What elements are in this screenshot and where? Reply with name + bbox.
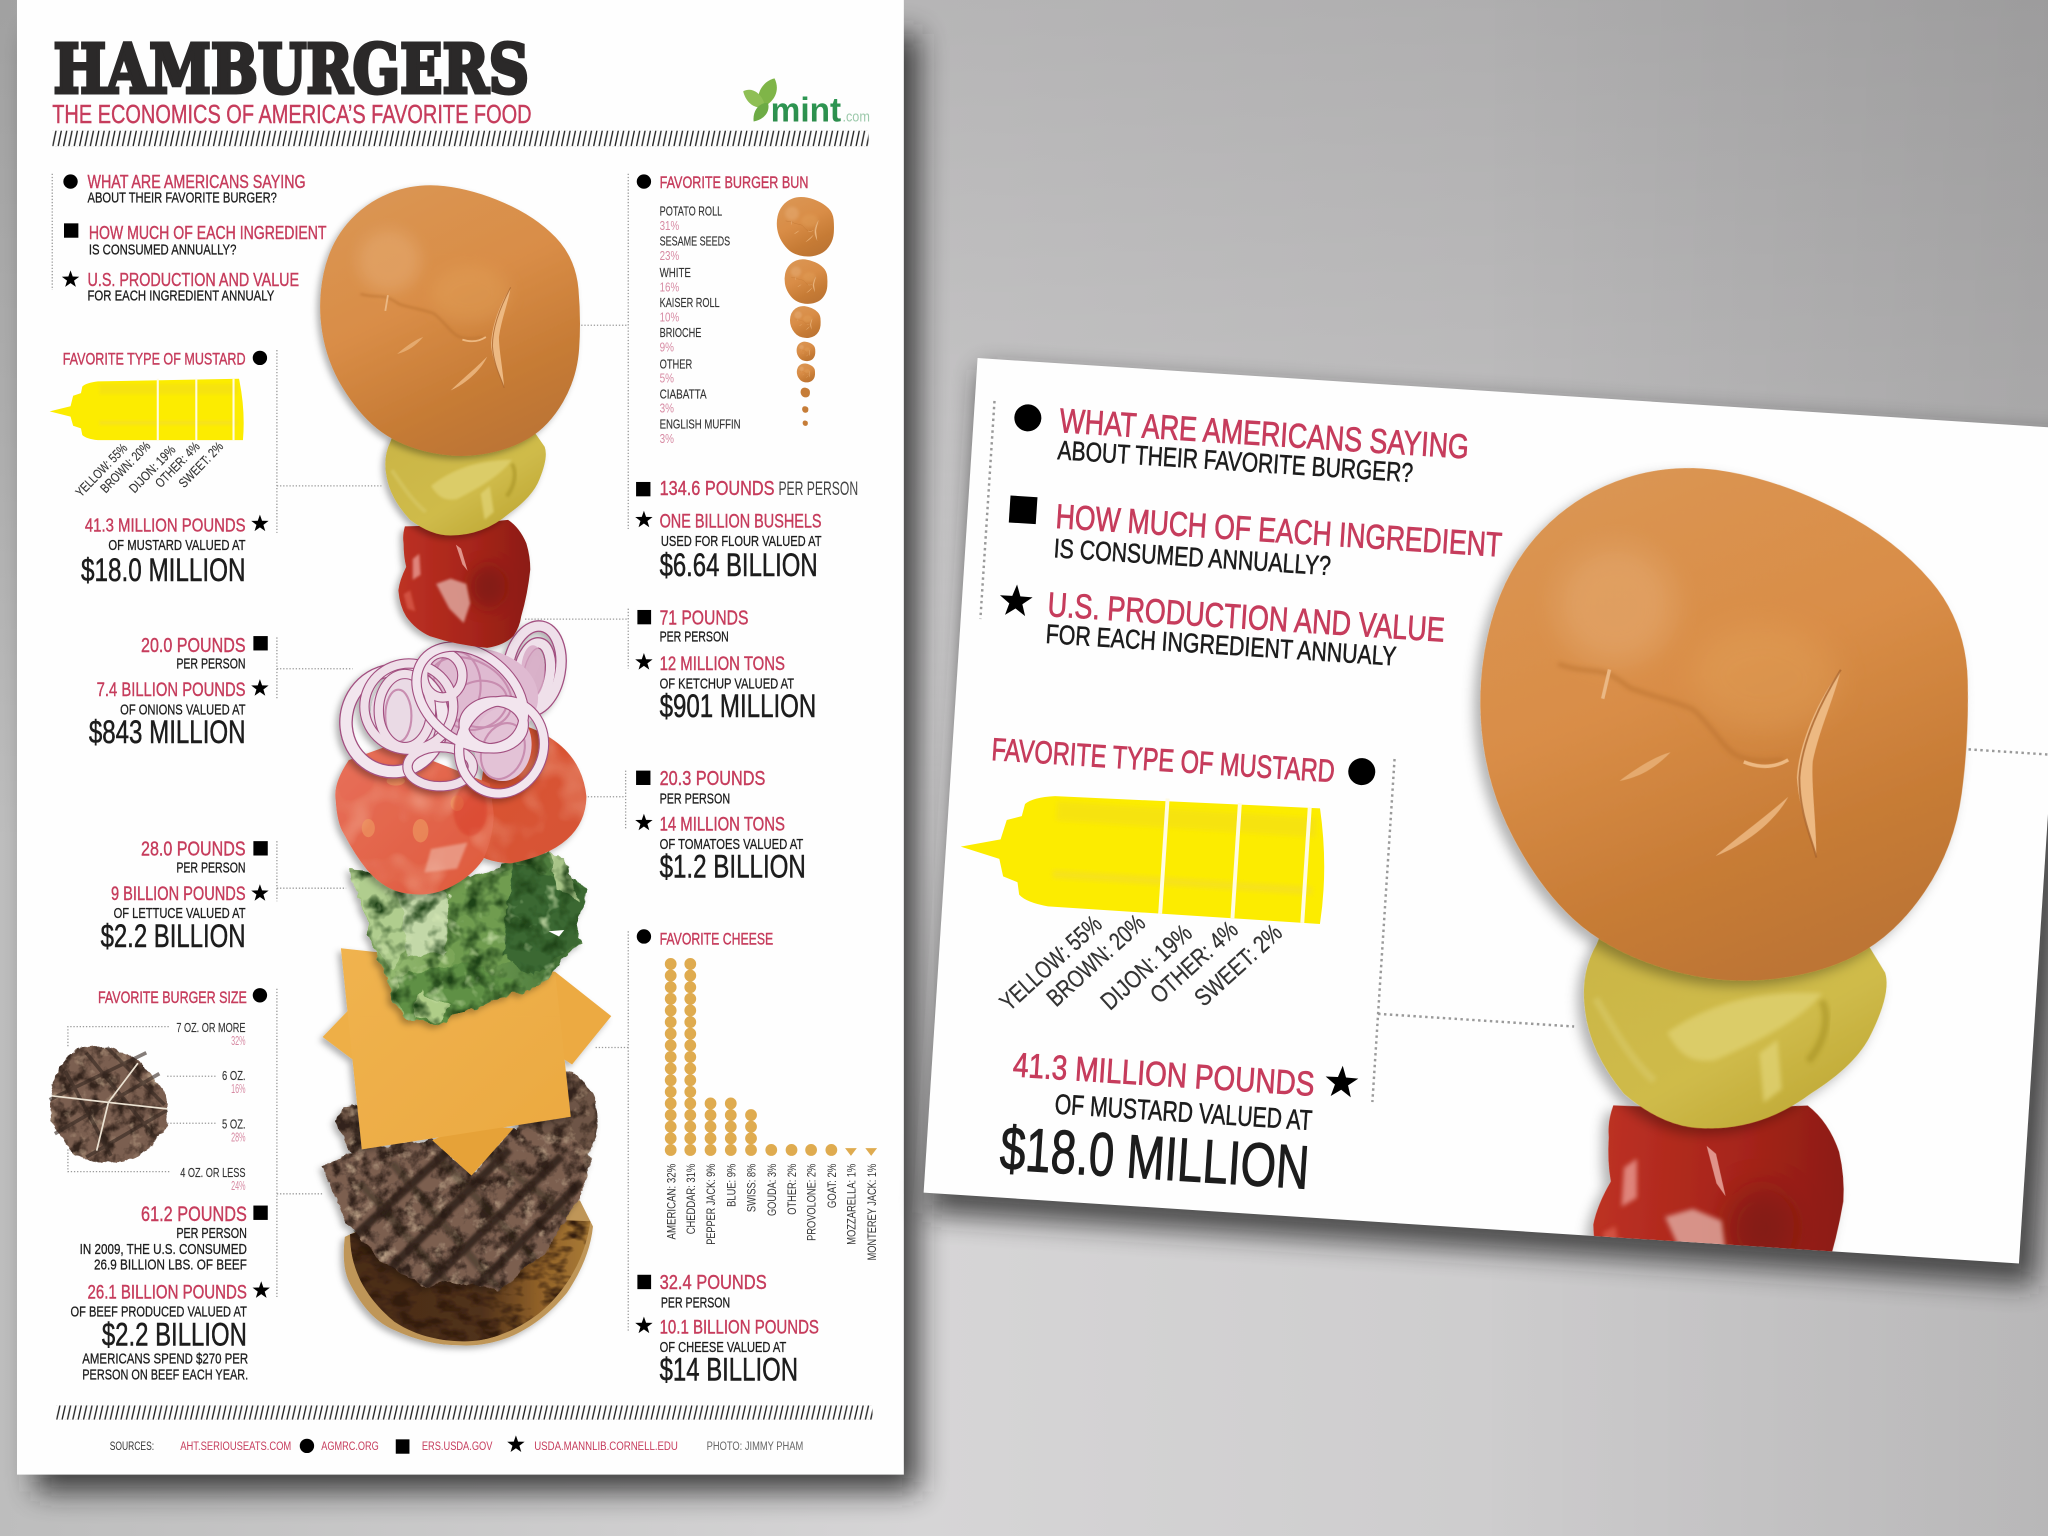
panel: favorite burger size: 5 OZ. xyxy=(222,1116,246,1131)
panel: favorite burger bun: USED FOR FLOUR VALUED AT xyxy=(661,533,822,550)
callout: tomatoes: 20.3 POUNDS xyxy=(660,768,765,790)
panel: favorite burger bun: ENGLISH MUFFIN xyxy=(660,416,741,431)
panel: favorite burger bun: 134.6 POUNDS xyxy=(660,478,775,500)
callout: onions: 20.0 POUNDS xyxy=(141,635,246,657)
panel: favorite type of mustard: 41.3 MILLION POUNDS xyxy=(85,515,246,536)
footer: sources: PHOTO: JIMMY PHAM xyxy=(707,1439,803,1453)
panel: favorite burger size: OF BEEF PRODUCED VALUED AT xyxy=(71,1304,247,1321)
chart labels: cheese types: PROVOLONE: 2% xyxy=(805,1164,819,1241)
title: HAMBURGERS xyxy=(54,30,529,109)
mustard share labels: SWEET: 2% xyxy=(176,439,226,491)
panel: favorite cheese: OF CHEESE VALUED AT xyxy=(660,1339,786,1356)
callout: ketchup xyxy=(525,607,816,724)
footer: sources: AGMRC.ORG xyxy=(321,1439,379,1453)
panel: favorite burger bun: OTHER xyxy=(660,356,692,371)
inset mustard panel: BROWN: 20% xyxy=(1042,910,1151,1012)
callout: tomatoes xyxy=(588,768,806,885)
icon: mustard bottle chart xyxy=(50,379,244,440)
panel: favorite burger bun: 3% xyxy=(660,401,674,416)
panel: favorite cheese: PER PERSON xyxy=(661,1294,730,1311)
panel: favorite burger size: PERSON ON BEEF EACH YEAR. xyxy=(82,1366,248,1383)
panel: favorite burger bun: SESAME SEEDS xyxy=(660,234,730,249)
legend: symbol key: ABOUT THEIR FAVORITE BURGER? xyxy=(88,190,277,206)
panel: favorite type of mustard: $18.0 MILLION xyxy=(81,551,246,588)
panel: magnified inset detail xyxy=(924,358,2048,1264)
panel: favorite type of mustard: OF MUSTARD VALUED AT xyxy=(108,537,246,554)
icon: front beef patty xyxy=(323,1128,593,1306)
footer: sources: ERS.USDA.GOV xyxy=(422,1439,493,1453)
panel: favorite cheese: 32.4 POUNDS xyxy=(660,1272,767,1294)
panel: favorite cheese: 10.1 BILLION POUNDS xyxy=(660,1318,819,1339)
panel: favorite burger bun: POTATO ROLL xyxy=(660,204,722,219)
icon: bottom bun xyxy=(344,1200,593,1346)
inset mustard panel: FAVORITE TYPE OF MUSTARD xyxy=(991,731,1336,789)
legend: symbol key xyxy=(52,171,327,304)
callout: ketchup: OF KETCHUP VALUED AT xyxy=(660,675,794,692)
panel: favorite type of mustard xyxy=(50,349,381,588)
icon: proportional bun column xyxy=(777,197,834,426)
title xyxy=(52,30,532,129)
panel: favorite burger bun: CIABATTA xyxy=(660,386,707,401)
panel: favorite burger size: AMERICANS SPEND $270 PER xyxy=(82,1351,248,1368)
legend: symbol key: IS CONSUMED ANNUALLY? xyxy=(89,243,236,259)
panel: favorite burger size: $2.2 BILLION xyxy=(102,1315,247,1352)
callout: onions: 7.4 BILLION POUNDS xyxy=(97,680,246,701)
chart labels: cheese types: AMERICAN: 32% xyxy=(664,1164,678,1240)
chart: cheese preference stacks xyxy=(671,956,877,1156)
inset legend: ABOUT THEIR FAVORITE BURGER? xyxy=(1057,435,1414,488)
inset mustard panel: 41.3 MILLION POUNDS xyxy=(1012,1046,1316,1104)
callout: ketchup: 12 MILLION TONS xyxy=(660,654,785,675)
logo: mint.com: .com xyxy=(842,109,870,125)
chart labels: cheese types xyxy=(664,1164,879,1260)
chart labels: cheese types: CHEDDAR: 31% xyxy=(684,1164,698,1234)
icon: red onion rings xyxy=(335,622,567,806)
panel: favorite burger size: 6 OZ. xyxy=(222,1068,246,1083)
mustard share labels xyxy=(72,438,226,500)
inset legend: FOR EACH INGREDIENT ANNUALY xyxy=(1045,619,1397,672)
inset burger detail xyxy=(1466,466,1968,1252)
inset mustard panel: YELLOW: 55% xyxy=(995,911,1108,1017)
icon: cheese slices xyxy=(323,948,611,1176)
chart labels: cheese types: MONTEREY JACK: 1% xyxy=(865,1164,879,1260)
callout: ketchup: $901 MILLION xyxy=(660,687,816,724)
chart labels: cheese types: PEPPER JACK: 9% xyxy=(704,1164,718,1245)
inset mustard panel: SWEET: 2% xyxy=(1190,919,1288,1012)
icon: tomato slices xyxy=(335,725,586,894)
icon: patty pie chart xyxy=(50,1047,167,1163)
panel: favorite burger size: 26.9 BILLION LBS. OF BEEF xyxy=(94,1257,247,1274)
callout: tomatoes: OF TOMATOES VALUED AT xyxy=(660,836,803,853)
panel: favorite burger bun: KAISER ROLL xyxy=(660,295,720,310)
drop shadow of magnified inset xyxy=(927,371,2048,1285)
footer: sources: AHT.SERIOUSEATS.COM xyxy=(180,1439,291,1453)
panel: favorite burger bun: 23% xyxy=(660,248,679,263)
panel: favorite burger bun: 5% xyxy=(660,371,674,386)
panel: favorite burger bun: $6.64 BILLION xyxy=(660,546,818,583)
callout: tomatoes: 14 MILLION TONS xyxy=(660,815,785,836)
chart labels: cheese types: OTHER: 2% xyxy=(785,1164,799,1215)
chart labels: cheese types: BLUE: 9% xyxy=(724,1164,738,1207)
panel: favorite burger bun: PER PERSON xyxy=(778,478,858,500)
callout: tomatoes: PER PERSON xyxy=(660,790,730,807)
logo: mint.com: mint xyxy=(771,91,841,129)
panel: favorite burger size: 24% xyxy=(231,1178,246,1193)
panel: favorite burger bun: 10% xyxy=(660,309,679,324)
logo: mint.com xyxy=(743,78,870,129)
legend: symbol key: WHAT ARE AMERICANS SAYING xyxy=(88,171,306,192)
panel: main infographic poster xyxy=(17,0,904,1475)
panel: favorite burger size: IN 2009, THE U.S. CONSUMED xyxy=(80,1241,247,1258)
callout: onions: $843 MILLION xyxy=(89,713,246,750)
mustard share labels: DIJON: 19% xyxy=(126,442,179,496)
inset mustard panel: $18.0 MILLION xyxy=(998,1114,1311,1203)
panel: favorite cheese xyxy=(596,929,879,1388)
callout: lettuce: $2.2 BILLION xyxy=(101,917,246,954)
panel: favorite burger bun: ONE BILLION BUSHELS xyxy=(660,512,822,533)
panel: favorite burger bun: WHITE xyxy=(660,265,691,280)
panel: favorite cheese: $14 BILLION xyxy=(660,1351,798,1388)
icon: back beef patty xyxy=(337,1070,598,1156)
panel: favorite burger size: 26.1 BILLION POUNDS xyxy=(88,1282,247,1303)
callout: tomatoes: $1.2 BILLION xyxy=(660,848,806,885)
panel: favorite burger bun: 3% xyxy=(660,431,674,446)
inset legend: IS CONSUMED ANNUALLY? xyxy=(1053,533,1332,581)
drop shadow of main poster xyxy=(35,34,918,1492)
panel: favorite burger bun: BRIOCHE xyxy=(660,325,702,340)
callout: lettuce: 28.0 POUNDS xyxy=(141,839,246,861)
footer: sources: SOURCES: xyxy=(110,1439,154,1453)
legend: symbol key: HOW MUCH OF EACH INGREDIENT xyxy=(89,222,327,243)
panel: favorite burger size: 28% xyxy=(231,1130,246,1145)
callout: onions: OF ONIONS VALUED AT xyxy=(120,701,246,718)
legend: symbol key: FOR EACH INGREDIENT ANNUALY xyxy=(88,288,275,304)
panel: favorite burger size: 32% xyxy=(231,1033,246,1048)
callout: lettuce xyxy=(101,839,346,954)
panel: favorite type of mustard: FAVORITE TYPE OF MUSTARD xyxy=(63,349,246,368)
inset legend: U.S. PRODUCTION AND VALUE xyxy=(1047,586,1446,650)
legend: symbol key: U.S. PRODUCTION AND VALUE xyxy=(88,269,299,290)
panel: favorite cheese: FAVORITE CHEESE xyxy=(660,929,773,948)
callout: lettuce: PER PERSON xyxy=(176,859,246,876)
callout: onions: PER PERSON xyxy=(176,656,246,673)
inset mustard panel: OTHER: 4% xyxy=(1146,916,1244,1009)
panel: favorite burger bun: 31% xyxy=(660,218,679,233)
footer: sources: USDA.MANNLIB.CORNELL.EDU xyxy=(534,1439,678,1453)
callout: lettuce: 9 BILLION POUNDS xyxy=(111,884,246,905)
panel: favorite burger size: 7 OZ. OR MORE xyxy=(176,1020,246,1035)
callout: onions xyxy=(89,635,353,750)
panel: favorite burger size: FAVORITE BURGER SIZE xyxy=(98,988,247,1007)
inset mustard panel: OF MUSTARD VALUED AT xyxy=(1054,1088,1313,1136)
inset mustard panel xyxy=(960,738,2048,1190)
chart labels: cheese types: GOUDA: 3% xyxy=(765,1164,779,1216)
title: THE ECONOMICS OF AMERICA’S FAVORITE FOOD xyxy=(52,101,532,129)
panel: favorite burger size xyxy=(50,988,324,1383)
mustard share labels: BROWN: 20% xyxy=(97,438,154,496)
panel: favorite burger size: 4 OZ. OR LESS xyxy=(180,1165,246,1180)
panel: favorite burger bun xyxy=(581,173,858,583)
callout: ketchup: 71 POUNDS xyxy=(660,607,748,629)
mustard share labels: YELLOW: 55% xyxy=(72,440,131,500)
panel: favorite burger size: 61.2 POUNDS xyxy=(141,1203,247,1226)
panel: favorite burger bun: 9% xyxy=(660,339,674,354)
chart labels: cheese types: GOAT: 2% xyxy=(825,1164,839,1208)
panel: favorite burger bun: FAVORITE BURGER BUN xyxy=(660,173,808,192)
inset legend xyxy=(979,398,1509,678)
callout: ketchup: PER PERSON xyxy=(660,628,729,645)
panel: favorite burger size: 16% xyxy=(231,1081,246,1096)
illustration: exploded burger xyxy=(320,185,611,1346)
inset legend: WHAT ARE AMERICANS SAYING xyxy=(1058,402,1470,467)
chart labels: cheese types: MOZZARELLA: 1% xyxy=(845,1164,859,1245)
panel: favorite burger size: PER PERSON xyxy=(176,1225,247,1242)
mustard share labels: OTHER: 4% xyxy=(152,439,203,491)
chart labels: cheese types: SWISS: 8% xyxy=(745,1164,759,1212)
inset mustard panel: DIJON: 19% xyxy=(1096,920,1198,1016)
inset legend: HOW MUCH OF EACH INGREDIENT xyxy=(1055,498,1503,565)
panel: favorite burger bun: 16% xyxy=(660,279,679,294)
callout: lettuce: OF LETTUCE VALUED AT xyxy=(114,905,246,922)
footer: sources xyxy=(110,1435,803,1454)
icon: lettuce xyxy=(350,849,584,1025)
